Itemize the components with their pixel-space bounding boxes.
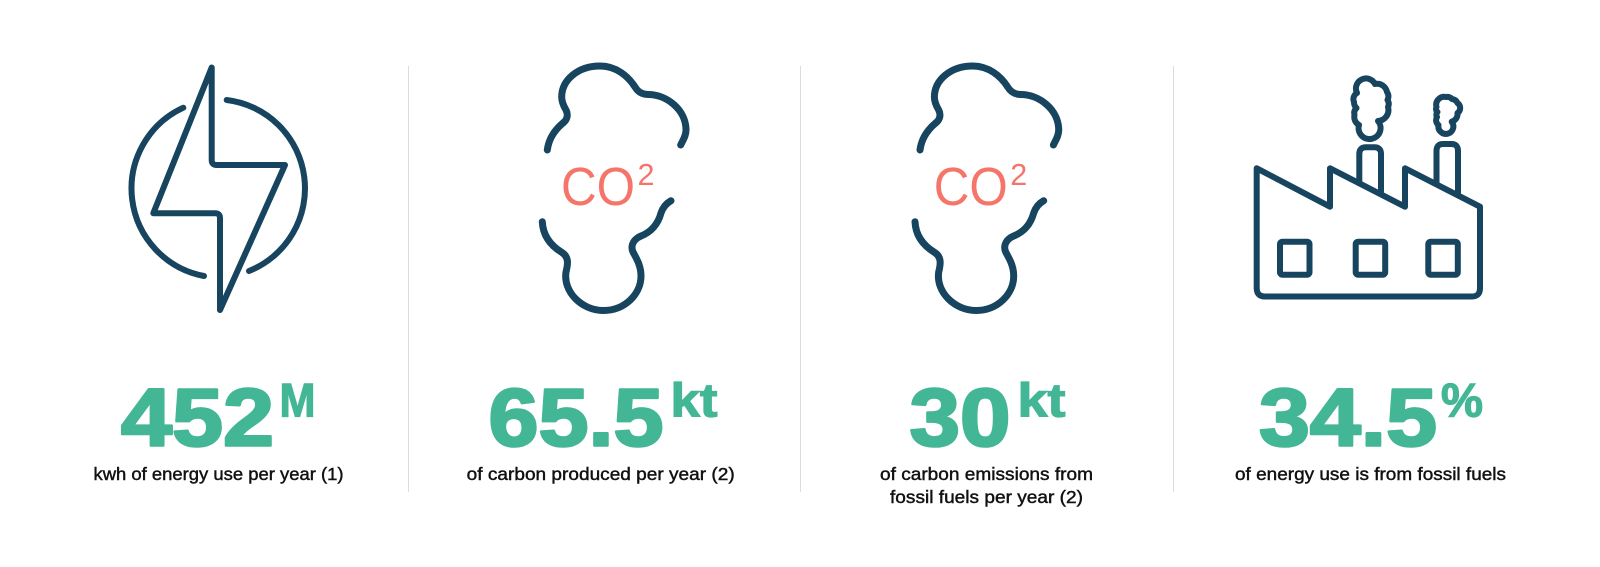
panel: carbon produced [467,66,735,484]
panel: carbon emissions [880,66,1093,507]
icon: CO2 cloud [915,66,1059,310]
stat: 65.5kt: 65.5 [488,372,664,464]
icon: CO2 cloud: CO [934,157,1008,217]
stat: 65.5kt [488,372,718,464]
label: carbon emissions [880,464,1093,507]
stat: 452M: 452 [121,372,274,464]
label: carbon emissions: of carbon emissions from [880,464,1093,484]
icon: CO2 cloud: CO [561,157,635,217]
icon: lightning bolt in circle [132,68,305,310]
label: energy use: kwh of energy use per year (1) [94,464,344,484]
panel: energy use [94,68,344,484]
label: fossil fuel share: of energy use is from fossil fuels [1235,464,1506,484]
label: carbon produced: of carbon produced per year (2) [467,464,735,484]
stat: 34.5%: 34.5 [1259,372,1437,464]
stat: 65.5kt: kt [670,374,718,426]
stat: 34.5%: % [1441,374,1483,426]
stat: 30kt: 30 [910,372,1010,464]
panel: fossil fuel share [1235,78,1506,484]
stat: 30kt [910,372,1066,464]
stat: 452M: M [280,374,316,426]
icon: CO2 cloud [542,66,686,310]
icon: CO2 cloud: 2 [1010,157,1027,192]
icon: factory [1257,78,1480,297]
icon: CO2 cloud: 2 [638,157,654,192]
label: carbon emissions: fossil fuels per year (2) [890,487,1083,507]
stat: 30kt: kt [1018,374,1066,426]
